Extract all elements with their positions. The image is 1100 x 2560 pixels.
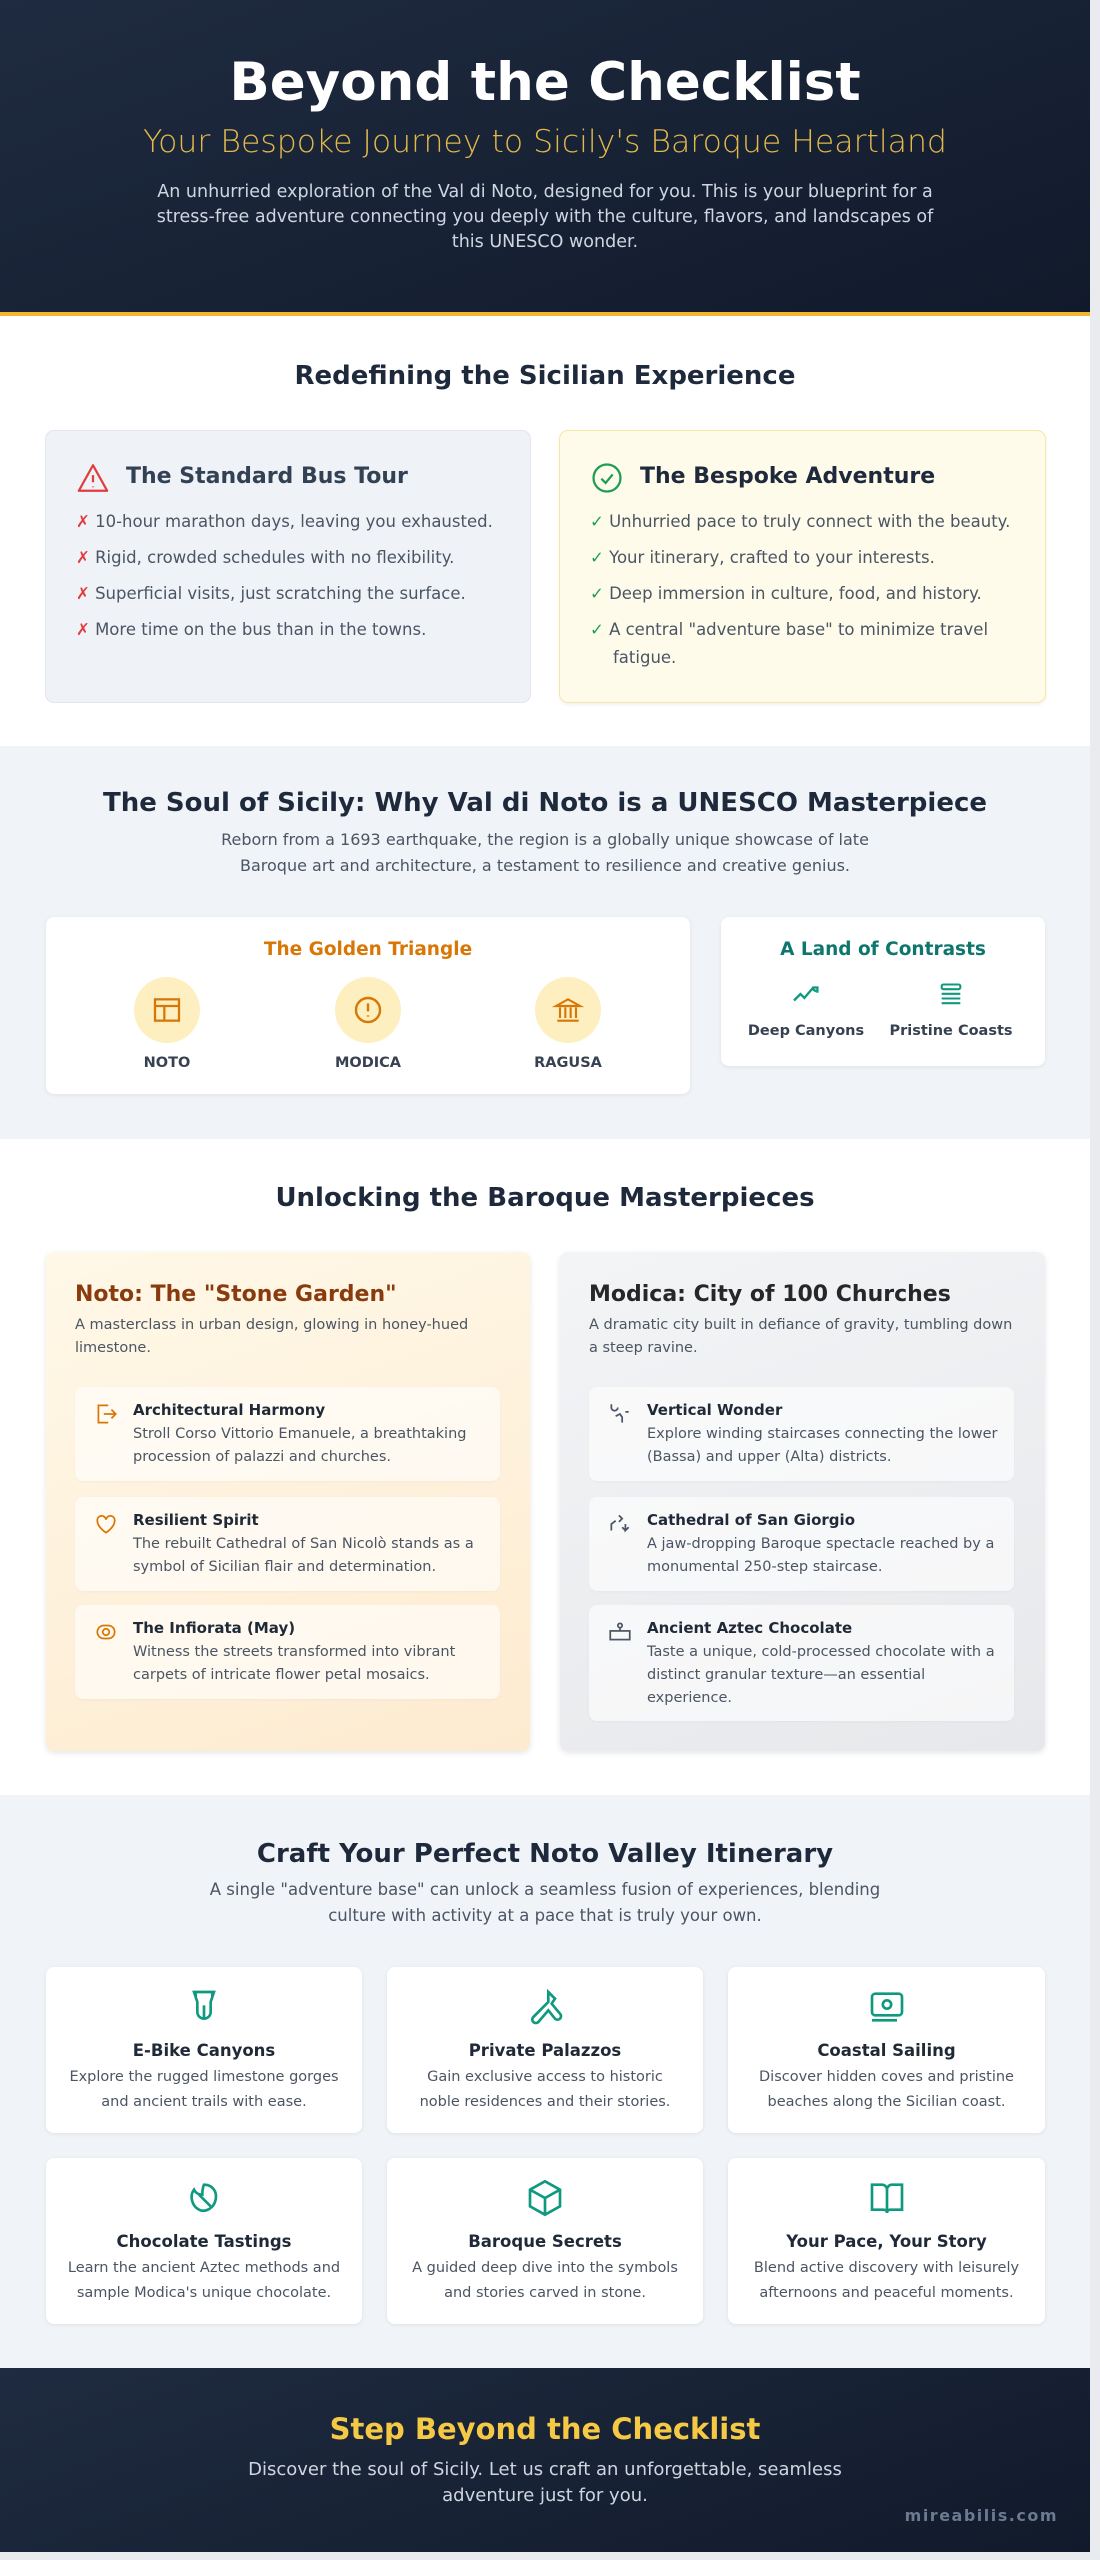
- panel title: Noto: The "Stone Garden": [75, 1282, 397, 1307]
- card: private palazzos: Private Palazzos: [469, 2041, 621, 2060]
- card: e-bike canyons: E-Bike Canyons: [133, 2041, 275, 2060]
- item: architectural harmony: Architectural Harmony: [133, 1401, 325, 1419]
- list: ✗ More time on the bus than in the towns.: [76, 620, 426, 639]
- list: [76, 512, 493, 639]
- card: chocolate tastings: Learn the ancient Aztec methods and: [68, 2260, 340, 2276]
- card: e-bike canyons: and ancient trails with ease.: [101, 2094, 307, 2110]
- card heading: The Bespoke Adventure: [640, 464, 935, 489]
- list: ✓ Unhurried pace to truly connect with the beauty.: [590, 512, 1010, 531]
- panel text: [589, 1317, 1012, 1356]
- town: noto: [134, 977, 200, 1071]
- town: modica: MODICA: [335, 1055, 401, 1071]
- item: architectural harmony: [75, 1387, 500, 1481]
- item: aztec chocolate: Ancient Aztec Chocolate: [647, 1619, 852, 1637]
- panel: standard bus tour: [46, 431, 530, 702]
- card: chocolate tastings: sample Modica's unique chocolate.: [77, 2285, 331, 2301]
- heading: Redefining the Sicilian Experience: [294, 361, 795, 391]
- intro text: An unhurried exploration of the Val di Noto, designed for you. This is your blueprint for a stress-free adventure connecting you deeply with the culture, flavors, and landscapes of: [157, 182, 933, 227]
- item: infiorata: [75, 1605, 500, 1699]
- card: baroque secrets: A guided deep dive into the symbols: [412, 2260, 678, 2276]
- section: itinerary: [0, 1795, 1090, 2368]
- card: baroque secrets: Baroque Secrets: [468, 2232, 622, 2251]
- item: san giorgio: Cathedral of San Giorgio: [647, 1511, 855, 1529]
- panel heading: The Golden Triangle: [264, 939, 472, 960]
- card: private palazzos: [387, 1967, 703, 2133]
- town: ragusa: RAGUSA: [534, 1055, 602, 1071]
- section: redefining: [0, 316, 1090, 746]
- card: coastal sailing: Discover hidden coves and pristine: [759, 2069, 1014, 2085]
- section: soul of sicily: [0, 746, 1090, 1139]
- icon: warning: [78, 464, 108, 492]
- footer heading: Step Beyond the Checklist: [330, 2412, 760, 2446]
- card: coastal sailing: Coastal Sailing: [817, 2041, 956, 2060]
- list: ✗ Rigid, crowded schedules with no flexibility.: [76, 548, 454, 567]
- section: baroque masterpieces: [0, 1139, 1090, 1795]
- heading: Unlocking the Baroque Masterpieces: [275, 1183, 815, 1213]
- subtitle: Your Bespoke Journey to Sicily's Baroque Heartland: [143, 124, 947, 160]
- card: coastal sailing: [728, 1967, 1045, 2133]
- item: san giorgio: [589, 1497, 1014, 1591]
- card: chocolate tastings: Chocolate Tastings: [117, 2232, 291, 2251]
- panel: bespoke adventure: [560, 431, 1045, 702]
- panel text: a steep ravine.: [589, 1340, 698, 1356]
- item: resilient spirit: [75, 1497, 500, 1591]
- list: ✗ Superficial visits, just scratching the surface.: [76, 584, 466, 603]
- item: vertical wonder: Explore winding staircases connecting the lower (Bassa) and upper (Alta) districts.: [647, 1426, 998, 1465]
- item: aztec chocolate: [589, 1605, 1014, 1721]
- text: Reborn from a 1693 earthquake, the region is a globally unique showcase of late Baroque art and architecture, a testament to resilience and creative genius.: [221, 830, 869, 875]
- list: ✓ Deep immersion in culture, food, and history.: [590, 584, 982, 603]
- item: vertical wonder: [589, 1387, 1014, 1481]
- header: [0, 0, 1090, 316]
- intro text: this UNESCO wonder.: [452, 232, 638, 252]
- town: modica: [335, 977, 401, 1071]
- item: deep canyons: Deep Canyons: [748, 1023, 864, 1039]
- panel: modica: [560, 1252, 1045, 1751]
- item: resilient spirit: The rebuilt Cathedral of San Nicolò stands as a symbol of Sicilian flair and determination.: [133, 1536, 474, 1575]
- item: pristine coasts: Pristine Coasts: [889, 1023, 1013, 1039]
- panel title: Modica: City of 100 Churches: [589, 1282, 951, 1307]
- list: ✓ A central "adventure base" to minimize travel fatigue.: [590, 620, 988, 667]
- brand: mireabilis.com: [905, 2506, 1058, 2525]
- card: chocolate tastings: [46, 2158, 362, 2324]
- text: A single "adventure base" can unlock a seamless fusion of experiences, blending culture with activity at a pace that is truly your own.: [210, 1880, 880, 1925]
- title: Beyond the Checklist: [229, 52, 861, 113]
- footer text: Discover the soul of Sicily. Let us craft an unforgettable, seamless adventure just for you.: [248, 2459, 842, 2506]
- item: infiorata: Witness the streets transformed into vibrant carpets of intricate flower petal mosaics.: [133, 1644, 455, 1683]
- item: infiorata: The Infiorata (May): [133, 1619, 295, 1637]
- card: your pace: Your Pace, Your Story: [786, 2232, 987, 2251]
- icon: check circle: [592, 463, 622, 493]
- card: baroque secrets: [387, 2158, 703, 2324]
- item: resilient spirit: Resilient Spirit: [133, 1511, 259, 1529]
- intro text: [157, 182, 934, 252]
- card heading: The Standard Bus Tour: [126, 464, 408, 489]
- card: private palazzos: noble residences and their stories.: [420, 2094, 670, 2110]
- panel heading: A Land of Contrasts: [780, 939, 986, 960]
- card: your pace: [728, 2158, 1045, 2324]
- heading: The Soul of Sicily: Why Val di Noto is a UNESCO Masterpiece: [103, 788, 987, 818]
- list: ✗ 10-hour marathon days, leaving you exhausted.: [76, 512, 493, 531]
- card: your pace: afternoons and peaceful moments.: [759, 2285, 1014, 2301]
- item: pristine coasts: [889, 984, 1013, 1039]
- footer: [0, 2368, 1090, 2552]
- panel: noto: [46, 1252, 530, 1751]
- panel: land of contrasts: [721, 917, 1045, 1066]
- card: your pace: Blend active discovery with leisurely: [754, 2260, 1019, 2276]
- item: deep canyons: [748, 986, 864, 1039]
- panel text: A masterclass in urban design, glowing in honey-hued limestone.: [75, 1317, 468, 1356]
- item: san giorgio: A jaw-dropping Baroque spectacle reached by a monumental 250-step staircase.: [647, 1536, 994, 1575]
- card: baroque secrets: and stories carved in stone.: [444, 2285, 646, 2301]
- card: private palazzos: Gain exclusive access to historic: [427, 2069, 663, 2085]
- card: e-bike canyons: [46, 1967, 362, 2133]
- list: ✓ Your itinerary, crafted to your interests.: [590, 548, 935, 567]
- town: noto: NOTO: [144, 1055, 190, 1071]
- card: e-bike canyons: Explore the rugged limestone gorges: [69, 2069, 339, 2085]
- item: aztec chocolate: Taste a unique, cold-processed chocolate with a distinct granular texture—an essential experience.: [647, 1644, 995, 1706]
- item: vertical wonder: Vertical Wonder: [647, 1401, 782, 1419]
- item: architectural harmony: Stroll Corso Vittorio Emanuele, a breathtaking procession of palazzi and churches.: [133, 1426, 466, 1465]
- panel: golden triangle: [46, 917, 690, 1094]
- list: [590, 512, 1010, 667]
- town: ragusa: [534, 977, 602, 1071]
- card: coastal sailing: beaches along the Sicilian coast.: [767, 2094, 1006, 2110]
- heading: Craft Your Perfect Noto Valley Itinerary: [257, 1839, 833, 1869]
- panel text: A dramatic city built in defiance of gravity, tumbling down: [589, 1317, 1012, 1333]
